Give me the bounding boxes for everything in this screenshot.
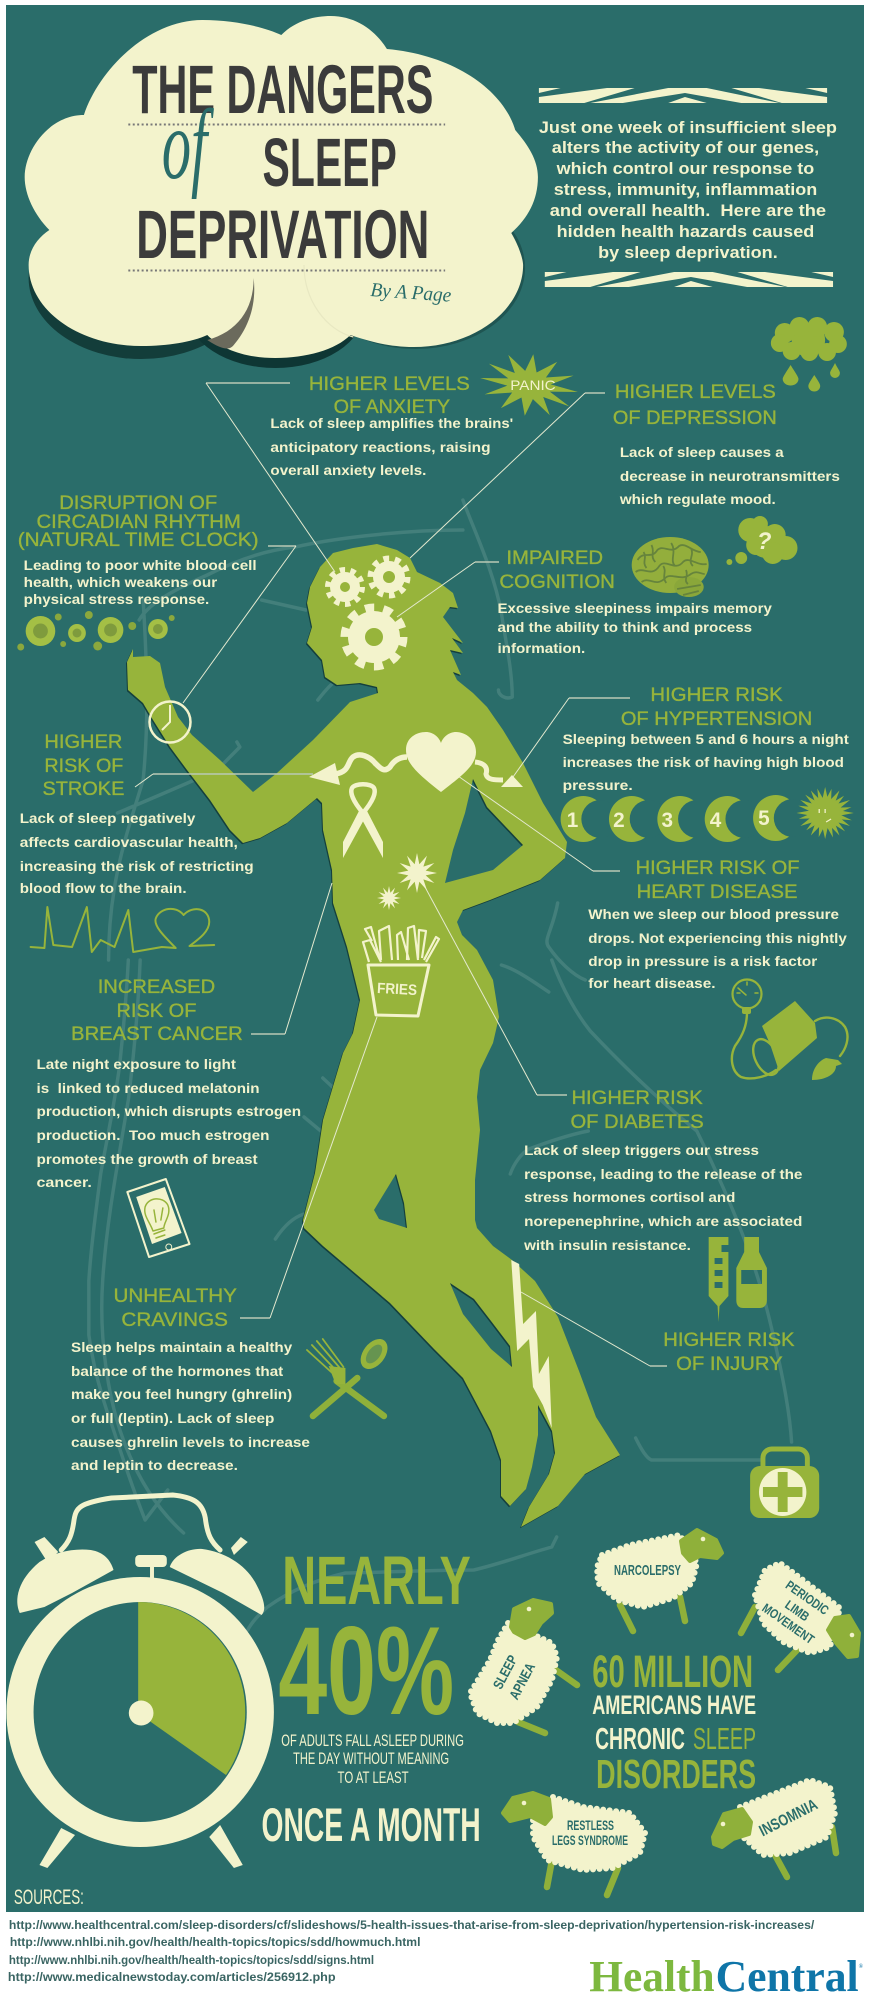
icon: fries: FRIES [377, 980, 417, 999]
icon: phone with light bulb [127, 1179, 190, 1257]
section: anxiety: HIGHER LEVELS [309, 373, 470, 395]
cloud title panel [25, 16, 538, 368]
intro text block: Just one week of insufficient sleep [539, 118, 837, 137]
section: heart disease: drop in pressure is a risk factor [588, 953, 818, 969]
stat: 60 million americans: 60 MILLION [592, 1648, 753, 1697]
icon: blood pressure cuff [732, 980, 848, 1080]
sheep: periodic limb movement: MOVEMENT [759, 1600, 817, 1647]
icon: numbered moons: 5 [758, 807, 770, 830]
section: stroke: affects cardiovascular health, [20, 834, 238, 850]
section: impaired cognition: information. [497, 640, 585, 656]
heading: the dangers of sleep deprivation: DEPRIVATION [136, 196, 429, 273]
heading: the dangers of sleep deprivation: of [162, 89, 215, 200]
section: unhealthy cravings: and leptin to decrease. [71, 1457, 238, 1473]
section: diabetes: HIGHER RISK [571, 1087, 703, 1109]
section: hypertension: OF HYPERTENSION [621, 708, 812, 730]
sheep: restless legs syndrome [503, 1793, 645, 1895]
section: depression [613, 317, 847, 507]
sheep: narcolepsy [597, 1530, 722, 1631]
section: unhealthy cravings [71, 1285, 393, 1473]
section: breast cancer [37, 976, 301, 1257]
section: impaired cognition [497, 516, 797, 656]
section: stroke: blood flow to the brain. [20, 880, 187, 896]
logo: HealthCentral: ® [859, 1963, 864, 1970]
sheep: periodic limb movement: LIMB [782, 1597, 812, 1624]
stat: nearly 40 percent [262, 1542, 481, 1851]
sheep: restless legs syndrome: LEGS SYNDROME [552, 1832, 628, 1848]
section: heart disease: drops. Not experiencing this nightly [588, 930, 847, 946]
section: circadian rhythm: physical stress response. [24, 591, 209, 607]
section: breast cancer: INCREASED [98, 976, 215, 998]
section: diabetes: stress hormones cortisol and [524, 1189, 735, 1205]
section: injury: HIGHER RISK [663, 1329, 795, 1351]
section: hypertension: increases the risk of having high blood [563, 754, 844, 770]
section: impaired cognition: Excessive sleepiness impairs memory [497, 600, 772, 616]
section: depression: Lack of sleep causes a [620, 444, 784, 460]
icon: fork and spoon [307, 1334, 393, 1416]
intro text block: stress, immunity, inflammation [554, 180, 817, 199]
stat: nearly 40 percent: OF ADULTS FALL ASLEEP DURING [281, 1731, 464, 1750]
heading: the dangers of sleep deprivation [128, 51, 452, 307]
intro text block: hidden health hazards caused [557, 222, 814, 241]
logo: HealthCentral [589, 1953, 864, 2000]
section: breast cancer: is linked to reduced melatonin [37, 1080, 260, 1096]
section: circadian rhythm: CIRCADIAN RHYTHM [37, 511, 241, 533]
section: circadian rhythm: DISRUPTION OF [59, 492, 217, 514]
sheep: periodic limb movement [741, 1563, 859, 1670]
sources: http://www.nhlbi.nih.gov/health/health-topics/topics/sdd/signs.html [9, 1953, 374, 1967]
section: breast cancer: BREAST CANCER [71, 1023, 243, 1045]
section: anxiety [270, 347, 582, 478]
section: depression: decrease in neurotransmitters [620, 468, 840, 484]
section: injury: OF INJURY [676, 1353, 783, 1375]
section: hypertension: Sleeping between 5 and 6 hours a night [563, 731, 849, 747]
heading: the dangers of sleep deprivation: By A Page [370, 279, 452, 307]
section: unhealthy cravings: causes ghrelin levels to increase [71, 1434, 310, 1450]
section: breast cancer: Late night exposure to light [37, 1056, 236, 1072]
section: diabetes: with insulin resistance. [523, 1237, 691, 1253]
stat: nearly 40 percent: 40% [278, 1602, 454, 1741]
section: circadian rhythm: Leading to poor white blood cell [24, 557, 257, 573]
sheep: insomnia: INSOMNIA [757, 1796, 821, 1840]
section: circadian rhythm [17, 492, 259, 650]
section: heart disease: HIGHER RISK OF [636, 857, 800, 879]
section: breast cancer: production, which disrupts estrogen [37, 1103, 301, 1119]
sheep: sleep apnea: APNEA [506, 1660, 538, 1702]
sources [8, 1886, 815, 1984]
section: hypertension [561, 684, 858, 844]
intro text block: by sleep deprivation. [598, 243, 778, 262]
section: stroke: increasing the risk of restricting [20, 858, 254, 874]
section: stroke: STROKE [42, 778, 124, 800]
sources: http://www.healthcentral.com/sleep-disorders/cf/slideshows/5-health-issues-that-arise-from-sleep-deprivation/hypertension-risk-increases/ [9, 1918, 815, 1932]
icon: lightning bolt [511, 1260, 552, 1428]
section: breast cancer: cancer. [37, 1174, 92, 1190]
section: breast cancer: promotes the growth of breast [37, 1151, 258, 1167]
icon: numbered moons: 4 [710, 809, 722, 832]
icon: heartbeat line [31, 907, 214, 952]
section: unhealthy cravings: CRAVINGS [121, 1309, 228, 1331]
icon: rain cloud [771, 317, 847, 392]
icon: thought bubble [726, 516, 797, 565]
stat: 60 million americans: CHRONIC [595, 1721, 685, 1756]
section: unhealthy cravings: balance of the hormones that [71, 1363, 284, 1379]
section: anxiety: OF ANXIETY [334, 396, 450, 418]
logo: HealthCentral: Central [716, 1953, 859, 2000]
intro text block: and overall health. Here are the [550, 201, 826, 220]
stat: nearly 40 percent: TO AT LEAST [338, 1768, 409, 1787]
intro text block [539, 88, 837, 287]
icon: thought bubble: ? [757, 528, 772, 555]
icon: heart with arteries [309, 732, 523, 792]
section: hypertension: HIGHER RISK [650, 684, 783, 706]
section: impaired cognition: and the ability to think and process [497, 619, 752, 635]
section: heart disease [588, 857, 847, 991]
section: anxiety: Lack of sleep amplifies the brains' [270, 415, 513, 431]
stat: nearly 40 percent: NEARLY [282, 1542, 471, 1619]
sources: SOURCES: [14, 1886, 84, 1909]
section: anxiety: anticipatory reactions, raising [270, 439, 491, 455]
section: heart disease: When we sleep our blood pressure [588, 906, 839, 922]
section: breast cancer: production. Too much estrogen [37, 1127, 269, 1143]
sheep: sleep apnea: SLEEP [489, 1652, 521, 1692]
section: depression: OF DEPRESSION [613, 407, 777, 429]
icon: first aid kit [750, 1449, 819, 1518]
section: stroke: Lack of sleep negatively [20, 810, 196, 826]
icon: syringe and bottle [709, 1237, 767, 1322]
sheep: periodic limb movement: PERIODIC [783, 1577, 832, 1618]
heading: the dangers of sleep deprivation: THE DANGERS [132, 51, 433, 128]
stat: nearly 40 percent: ONCE A MONTH [262, 1799, 481, 1851]
section: depression: which regulate mood. [619, 491, 776, 507]
section: injury [663, 1329, 819, 1518]
stat: 60 million americans: AMERICANS HAVE [592, 1690, 756, 1720]
stat: 60 million americans: DISORDERS [596, 1751, 756, 1797]
sheep: restless legs syndrome: RESTLESS [567, 1817, 614, 1833]
section: diabetes [523, 1087, 803, 1322]
icon: numbered moons: 2 [613, 809, 625, 832]
section: diabetes: Lack of sleep triggers our stress [524, 1142, 759, 1158]
section: heart disease: HEART DISEASE [637, 881, 798, 903]
section: stroke: RISK OF [44, 755, 124, 777]
stat: nearly 40 percent: THE DAY WITHOUT MEANING [293, 1749, 449, 1768]
icon: wrist clock [150, 702, 190, 742]
stat: 60 million americans [592, 1648, 756, 1797]
section: unhealthy cravings: make you feel hungry (ghrelin) [71, 1386, 292, 1402]
sources: http://www.medicalnewstoday.com/articles/256912.php [8, 1970, 336, 1984]
stat: 60 million americans: SLEEP [693, 1721, 756, 1756]
sources: http://www.nhlbi.nih.gov/health/health-topics/topics/sdd/howmuch.html [10, 1935, 420, 1949]
section: stroke [20, 731, 254, 952]
section: impaired cognition: IMPAIRED [506, 547, 603, 569]
icon: numbered moons: 1 [567, 809, 579, 832]
sheep: sleep apnea [470, 1600, 577, 1733]
section: unhealthy cravings: Sleep helps maintain a healthy [71, 1339, 292, 1355]
section: unhealthy cravings: UNHEALTHY [114, 1285, 237, 1307]
section: circadian rhythm: health, which weakens our [24, 574, 218, 590]
section: stroke: HIGHER [44, 731, 122, 753]
icon: awareness ribbon [343, 784, 383, 858]
sheep: narcolepsy: NARCOLEPSY [614, 1562, 681, 1579]
sheep: insomnia [713, 1780, 836, 1877]
icon: numbered moons: 3 [661, 809, 673, 832]
section: diabetes: norepenephrine, which are associated [524, 1213, 802, 1229]
icon: numbered moons [561, 795, 811, 842]
logo: HealthCentral: Health [589, 1953, 715, 2000]
leader lines [135, 383, 667, 1366]
section: heart disease: for heart disease. [588, 975, 716, 991]
icon: angry sun [792, 782, 858, 844]
icon: panic starburst: PANIC [510, 377, 556, 393]
icon: panic starburst [476, 347, 582, 423]
icon: brain [632, 537, 709, 597]
icon: gears in head [328, 559, 407, 666]
section: depression: HIGHER LEVELS [615, 381, 776, 403]
icon: starbursts [377, 853, 437, 910]
section: impaired cognition: COGNITION [499, 571, 615, 593]
icon: alarm clock [6, 1495, 274, 1868]
body silhouette [126, 544, 620, 1528]
section: diabetes: OF DIABETES [570, 1111, 704, 1133]
icon: fries [363, 926, 439, 1016]
icon: blood cells [17, 611, 175, 650]
section: breast cancer: RISK OF [116, 1000, 197, 1022]
section: diabetes: response, leading to the release of the [524, 1166, 803, 1182]
intro text block: which control our response to [556, 159, 814, 178]
section: anxiety: overall anxiety levels. [270, 462, 426, 478]
section: hypertension: pressure. [563, 777, 633, 793]
section: unhealthy cravings: or full (leptin). Lack of sleep [71, 1410, 274, 1426]
heading: the dangers of sleep deprivation: SLEEP [263, 124, 397, 201]
intro text block: alters the activity of our genes, [552, 138, 819, 157]
section: circadian rhythm: (NATURAL TIME CLOCK) [18, 529, 259, 551]
